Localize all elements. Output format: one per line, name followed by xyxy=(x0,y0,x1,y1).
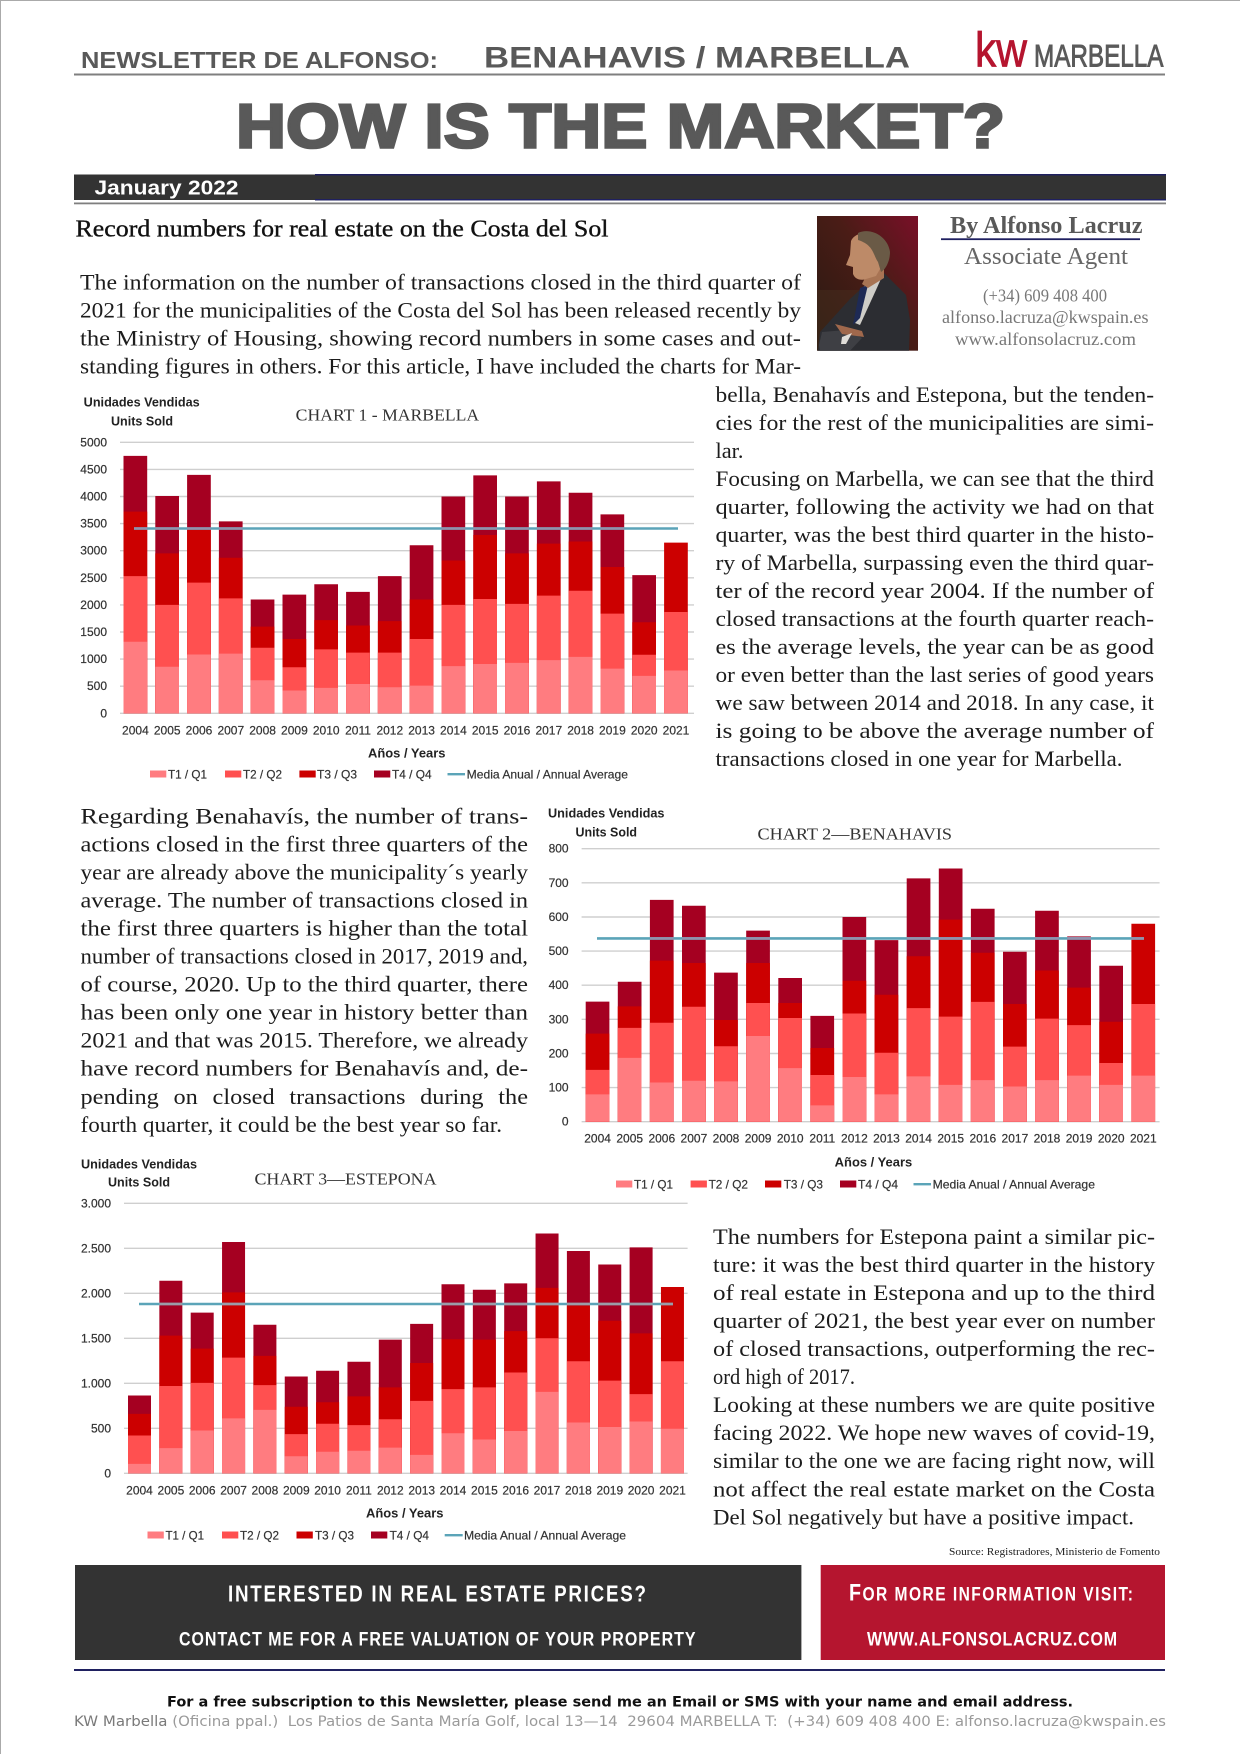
chart 1 y axis labels xyxy=(80,435,107,720)
chart 1 series T2 xyxy=(124,576,688,713)
call to action: valuation: INTERESTED IN REAL ESTATE PRICES? xyxy=(228,1580,646,1607)
paragraph: Marbella: Focusing on Marbella, we can see that the third xyxy=(716,466,1154,491)
chart 3 y axis labels xyxy=(81,1196,111,1480)
chart 1 title: CHART 1 - MARBELLA xyxy=(296,406,479,424)
chart 2 y axis labels: 200 xyxy=(549,1046,569,1060)
chart 2 series T1 xyxy=(586,1036,1155,1122)
chart 3 x axis labels: 2014 xyxy=(440,1484,467,1498)
chart 3 y axis labels: 3.000 xyxy=(81,1196,111,1210)
paragraph: Benahavís: actions closed in the first three quarters of the xyxy=(80,831,528,856)
paragraph: Benahavís: year are already above the municipality´s yearly xyxy=(80,859,529,884)
chart 3 legend: T4 / Q4 xyxy=(390,1528,429,1542)
chart 2 x axis labels: 2016 xyxy=(969,1132,996,1146)
chart 2 series T2 xyxy=(586,1002,1155,1122)
chart 1 y axis labels: 4000 xyxy=(80,490,107,504)
intro paragraph, full width xyxy=(80,269,802,378)
paragraph: Marbella: is going to be above the average number of xyxy=(716,718,1155,743)
chart 3 y axis title xyxy=(81,1158,197,1190)
paragraph: Benahavís: average. The number of transactions closed in xyxy=(80,887,528,912)
chart 1 y axis labels: 3500 xyxy=(80,517,107,531)
chart 2 x axis labels: 2015 xyxy=(937,1132,964,1146)
footer address: KW Marbella (Oficina ppal.) Los Patios de Santa María Golf, local 13—14 29604 MARBELLA T: (+34) 609 408 400 E: alfonso.lacruza@kwspain.es xyxy=(74,1714,1166,1730)
chart 1 x axis labels: 2018 xyxy=(567,724,594,738)
chart 3 y axis labels: 2.000 xyxy=(81,1286,111,1300)
chart 1 y axis labels: 1500 xyxy=(80,625,107,639)
logo: kw Marbella xyxy=(975,24,1164,78)
chart 1 annual average line xyxy=(134,527,678,530)
chart 2 x axis labels: 2021 xyxy=(1130,1132,1157,1146)
logo: kw Marbella: kw xyxy=(975,24,1028,78)
chart 3 x axis labels: 2021 xyxy=(659,1484,686,1498)
paragraph: Estepona: Looking at these numbers we are quite positive xyxy=(713,1392,1155,1417)
chart 1 legend: T4 / Q4 xyxy=(392,767,432,781)
chart 1 series T3 xyxy=(124,512,688,713)
logo: kw Marbella: MARBELLA xyxy=(1034,38,1164,74)
source note: Source: Registradores, Ministerio de Fomento xyxy=(949,1547,1160,1558)
contact lines xyxy=(942,286,1148,349)
chart 3 x axis title: Años / Years xyxy=(366,1506,444,1520)
chart 2 x axis labels: 2014 xyxy=(905,1132,932,1146)
call to action: website: FOR MORE INFORMATION VISIT: xyxy=(849,1579,1133,1606)
chart 3 x axis labels: 2011 xyxy=(346,1484,372,1498)
paragraph: Marbella xyxy=(716,382,1155,771)
chart 2 legend: T1 / Q1 xyxy=(634,1177,673,1191)
chart 2 legend: T3 / Q3 xyxy=(784,1177,823,1191)
chart 2 x axis labels: 2006 xyxy=(648,1132,675,1146)
chart 1 legend: Media Anual / Annual Average xyxy=(467,767,628,781)
paragraph: Marbella: bella, Benahavís and Estepona, but the tenden- xyxy=(716,382,1154,407)
header strip xyxy=(74,24,1165,78)
paragraph: Marbella: lar. xyxy=(716,438,744,463)
chart 3 y axis title: Units Sold xyxy=(108,1176,170,1190)
chart 2 y axis labels: 800 xyxy=(549,842,569,856)
paragraph: Marbella: ry of Marbella, surpassing even the third quar- xyxy=(716,550,1154,575)
chart 2 x axis labels: 2018 xyxy=(1034,1132,1061,1146)
chart 1 y axis labels: 3000 xyxy=(80,544,107,558)
chart 1 x axis labels: 2016 xyxy=(504,724,531,738)
chart 2 x axis labels: 2009 xyxy=(745,1132,772,1146)
paragraph: Benahavís: number of transactions closed in 2017, 2019 and, xyxy=(80,944,528,969)
paragraph: Estepona: Del Sol negatively but have a positive impact. xyxy=(713,1504,1134,1529)
chart 1 x axis labels: 2012 xyxy=(376,724,403,738)
paragraph: Estepona xyxy=(713,1224,1156,1529)
paragraph: Marbella: or even better than the last series of good years xyxy=(716,662,1154,687)
chart 1 legend: T3 / Q3 xyxy=(317,767,357,781)
chart 2 stacked bars xyxy=(586,868,1155,1122)
chart 1 x axis labels: 2020 xyxy=(631,724,658,738)
contact lines: www.alfonsolacruz.com xyxy=(955,329,1136,349)
paragraph: Estepona: The numbers for Estepona paint a similar pic- xyxy=(713,1224,1155,1249)
paragraph: Marbella: transactions closed in one year for Marbella. xyxy=(716,746,1122,771)
chart 3 legend: T3 / Q3 xyxy=(315,1528,354,1542)
newsletter label: NEWSLETTER DE ALFONSO: xyxy=(81,47,438,73)
chart 3 x axis labels xyxy=(126,1484,686,1498)
paragraph: Marbella: we saw between 2014 and 2018. In any case, it xyxy=(716,690,1155,715)
chart 3 x axis labels: 2004 xyxy=(126,1484,153,1498)
chart 3 legend: T2 / Q2 xyxy=(240,1528,279,1542)
chart 2 y axis labels: 700 xyxy=(549,876,569,890)
chart 1: Marbella xyxy=(80,396,694,781)
paragraph: Marbella: quarter, following the activity we had on that xyxy=(716,494,1155,519)
chart 3 x axis labels: 2005 xyxy=(158,1484,185,1498)
chart 3 title: CHART 3—ESTEPONA xyxy=(254,1170,437,1188)
chart 2 y axis labels: 0 xyxy=(562,1115,569,1129)
author name: By Alfonso Lacruz xyxy=(950,213,1143,239)
author role: Associate Agent xyxy=(964,243,1128,270)
call to action: valuation: CONTACT ME FOR A FREE VALUATION OF YOUR PROPERTY xyxy=(179,1628,696,1650)
date bar xyxy=(74,174,1166,204)
chart 1 y axis labels: 5000 xyxy=(80,435,107,449)
chart 2 x axis labels: 2005 xyxy=(616,1132,643,1146)
chart 2 x axis labels xyxy=(584,1132,1157,1146)
paragraph: Marbella: quarter, was the best third quarter in the histo- xyxy=(716,522,1154,547)
paragraph: Estepona: of real estate in Estepona and up to the third xyxy=(713,1280,1155,1305)
chart 2 legend xyxy=(616,1177,1095,1191)
paragraph: Benahavís: of course, 2020. Up to the third quarter, there xyxy=(80,972,528,997)
chart 2: Benahavis xyxy=(548,806,1160,1191)
author photo xyxy=(817,216,918,351)
chart 3 x axis labels: 2006 xyxy=(189,1484,216,1498)
paragraph: Estepona: of closed transactions, outperforming the rec- xyxy=(713,1336,1155,1361)
paragraph: Benahavís: has been only one year in history better than xyxy=(80,1000,528,1025)
paragraph: Estepona: quarter of 2021, the best year ever on number xyxy=(713,1308,1156,1333)
chart 3 x axis labels: 2016 xyxy=(502,1484,529,1498)
chart 3 x axis labels: 2015 xyxy=(471,1484,498,1498)
chart 3 series T1 xyxy=(128,1392,684,1473)
chart 1 x axis labels: 2019 xyxy=(599,724,626,738)
location heading: BENAHAVIS / MARBELLA xyxy=(484,42,910,74)
chart 3 legend: T1 / Q1 xyxy=(166,1528,204,1542)
chart 1 y axis title: Units Sold xyxy=(111,414,173,428)
paragraph: Benahavís: the first three quarters is higher than the total xyxy=(80,916,528,941)
chart 3 y axis title: Unidades Vendidas xyxy=(81,1158,197,1172)
footer subscription note: For a free subscription to this Newsletter, please send me an Email or SMS with your name and email address. xyxy=(167,1694,1073,1710)
chart 1 legend: T1 / Q1 xyxy=(168,767,207,781)
chart 3 x axis labels: 2019 xyxy=(596,1484,623,1498)
chart 1 y axis labels: 500 xyxy=(87,679,107,693)
chart 2 x axis labels: 2020 xyxy=(1098,1132,1125,1146)
chart 3 series T2 xyxy=(128,1338,684,1473)
chart 2 x axis labels: 2011 xyxy=(809,1132,836,1146)
chart 2 y axis labels: 300 xyxy=(549,1012,569,1026)
chart 2 y axis title: Units Sold xyxy=(576,826,637,840)
paragraph: Estepona: facing 2022. We hope new waves of covid-19, xyxy=(713,1420,1155,1445)
paragraph: Benahavís: pending on closed transactions during the xyxy=(80,1084,528,1109)
chart 3 stacked bars xyxy=(128,1233,684,1473)
chart 1 x axis labels: 2008 xyxy=(249,724,276,738)
paragraph: Marbella: closed transactions at the fourth quarter reach- xyxy=(716,606,1154,631)
chart 1 stacked bars xyxy=(124,456,688,713)
paragraph: Estepona: not affect the real estate market on the Costa xyxy=(713,1476,1155,1501)
chart 3 x axis labels: 2007 xyxy=(220,1484,247,1498)
chart 1 x axis labels: 2004 xyxy=(122,724,149,738)
chart 2 y axis labels: 500 xyxy=(549,944,569,958)
chart 1 x axis labels: 2015 xyxy=(472,724,499,738)
paragraph: Benahavís: have record numbers for Benahavís and, de- xyxy=(80,1056,528,1081)
chart 1 legend: T2 / Q2 xyxy=(243,767,282,781)
article headline: Record numbers for real estate on the Costa del Sol xyxy=(76,216,609,242)
chart 3 x axis labels: 2012 xyxy=(377,1484,404,1498)
chart 2 y axis labels: 100 xyxy=(549,1081,569,1095)
chart 2 x axis labels: 2013 xyxy=(873,1132,900,1146)
paragraph: Benahavís: 2021 and that was 2015. Therefore, we already xyxy=(80,1028,529,1053)
chart 1 series T4 xyxy=(124,456,656,713)
chart 3 y axis labels: 500 xyxy=(91,1421,111,1435)
chart 1 y axis labels: 2000 xyxy=(80,598,107,612)
date bar: January 2022 xyxy=(94,178,238,200)
chart 1 y axis labels: 1000 xyxy=(80,652,107,666)
chart 1 x axis labels: 2011 xyxy=(345,724,371,738)
chart 1 y axis title xyxy=(84,396,200,428)
chart 3 y axis labels: 2.500 xyxy=(81,1241,111,1255)
chart 2 y axis labels: 400 xyxy=(549,978,569,992)
chart 3 x axis labels: 2009 xyxy=(283,1484,310,1498)
chart 3 x axis labels: 2017 xyxy=(534,1484,561,1498)
chart 2 series T4 xyxy=(586,868,1123,1122)
chart 2 x axis labels: 2008 xyxy=(713,1132,740,1146)
title: HOW IS THE MARKET? xyxy=(236,93,1005,162)
chart 1 x axis labels: 2017 xyxy=(535,724,562,738)
chart 2 x axis labels: 2004 xyxy=(584,1132,611,1146)
chart 3 y axis labels: 1.500 xyxy=(81,1331,111,1345)
chart 2 x axis labels: 2017 xyxy=(1002,1132,1029,1146)
chart 2 x axis title: Años / Years xyxy=(835,1156,912,1170)
paragraph: Estepona: ture: it was the best third quarter in the history xyxy=(713,1252,1156,1277)
chart 1 x axis labels xyxy=(122,724,690,738)
chart 1 y axis labels: 4500 xyxy=(80,462,107,476)
call to action: valuation xyxy=(75,1565,801,1660)
chart 2 x axis labels: 2010 xyxy=(777,1132,804,1146)
chart 2 x axis labels: 2012 xyxy=(841,1132,868,1146)
chart 3 x axis labels: 2010 xyxy=(314,1484,341,1498)
chart 1 legend xyxy=(150,767,628,781)
chart 1 x axis labels: 2014 xyxy=(440,724,467,738)
chart 1 x axis labels: 2005 xyxy=(154,724,181,738)
chart 1 y axis title: Unidades Vendidas xyxy=(84,396,200,410)
chart 1 x axis labels: 2021 xyxy=(663,724,690,738)
chart 3 series T3 xyxy=(128,1287,684,1473)
chart 2 y axis title xyxy=(548,806,665,840)
chart 2 title: CHART 2—BENAHAVIS xyxy=(758,824,952,844)
chart 1 series T1 xyxy=(124,642,688,713)
chart 3 y axis labels: 1.000 xyxy=(81,1376,111,1390)
chart 3 legend: Media Anual / Annual Average xyxy=(464,1528,626,1542)
intro paragraph, full width: standing figures in others. For this article, I have included the charts for Mar- xyxy=(80,353,801,378)
chart 3 x axis labels: 2008 xyxy=(252,1484,279,1498)
chart 1 x axis labels: 2010 xyxy=(313,724,340,738)
chart 3 series T4 xyxy=(128,1233,653,1473)
intro paragraph, full width: The information on the number of transactions closed in the third quarter of xyxy=(80,269,802,294)
contact lines: (+34) 609 408 400 xyxy=(983,286,1107,306)
paragraph: Benahavís: Regarding Benahavís, the number of trans- xyxy=(80,803,528,828)
chart 1 x axis labels: 2006 xyxy=(186,724,213,738)
intro paragraph, full width: the Ministry of Housing, showing record numbers in some cases and out- xyxy=(80,325,801,350)
paragraph: Marbella: ter of the record year 2004. If the number of xyxy=(716,578,1155,603)
paragraph: Benahavís: fourth quarter, it could be the best year so far. xyxy=(80,1112,502,1137)
chart 3: Estepona xyxy=(81,1158,688,1542)
call to action: website: WWW.ALFONSOLACRUZ.COM xyxy=(867,1628,1117,1650)
chart 2 legend: Media Anual / Annual Average xyxy=(933,1177,1095,1191)
chart 1 x axis labels: 2007 xyxy=(217,724,244,738)
chart 2 x axis labels: 2019 xyxy=(1066,1132,1093,1146)
chart 3 legend xyxy=(148,1528,626,1542)
paragraph: Estepona: ord high of 2017. xyxy=(713,1364,855,1389)
paragraph: Estepona: similar to the one we are facing right now, will xyxy=(713,1448,1155,1473)
paragraph: Marbella: cies for the rest of the municipalities are simi- xyxy=(716,410,1154,435)
chart 1 x axis labels: 2013 xyxy=(408,724,435,738)
paragraph: Marbella: es the average levels, the year can be as good xyxy=(716,634,1154,659)
chart 2 x axis labels: 2007 xyxy=(681,1132,708,1146)
chart 2 y axis title: Unidades Vendidas xyxy=(548,806,665,820)
chart 2 legend: T4 / Q4 xyxy=(858,1177,898,1191)
chart 2 annual average line xyxy=(597,937,1144,940)
chart 2 y axis labels: 600 xyxy=(549,910,569,924)
call to action: website xyxy=(821,1565,1165,1660)
chart 3 x axis labels: 2018 xyxy=(565,1484,592,1498)
chart 3 y axis labels: 0 xyxy=(104,1466,111,1480)
chart 2 y axis labels xyxy=(549,842,569,1129)
chart 2 series T3 xyxy=(586,920,1155,1122)
chart 3 x axis labels: 2013 xyxy=(408,1484,435,1498)
contact lines: alfonso.lacruza@kwspain.es xyxy=(942,307,1148,327)
chart 1 y axis labels: 2500 xyxy=(80,571,107,585)
paragraph: Benahavís xyxy=(80,803,529,1137)
chart 1 y axis labels: 0 xyxy=(100,706,107,720)
chart 2 legend: T2 / Q2 xyxy=(709,1177,748,1191)
author details xyxy=(941,213,1148,349)
intro paragraph, full width: 2021 for the municipalities of the Costa del Sol has been released recently by xyxy=(80,297,802,322)
chart 1 x axis labels: 2009 xyxy=(281,724,308,738)
chart 3 x axis labels: 2020 xyxy=(628,1484,655,1498)
chart 3 annual average line xyxy=(139,1303,673,1305)
chart 1 x axis title: Años / Years xyxy=(368,746,446,760)
